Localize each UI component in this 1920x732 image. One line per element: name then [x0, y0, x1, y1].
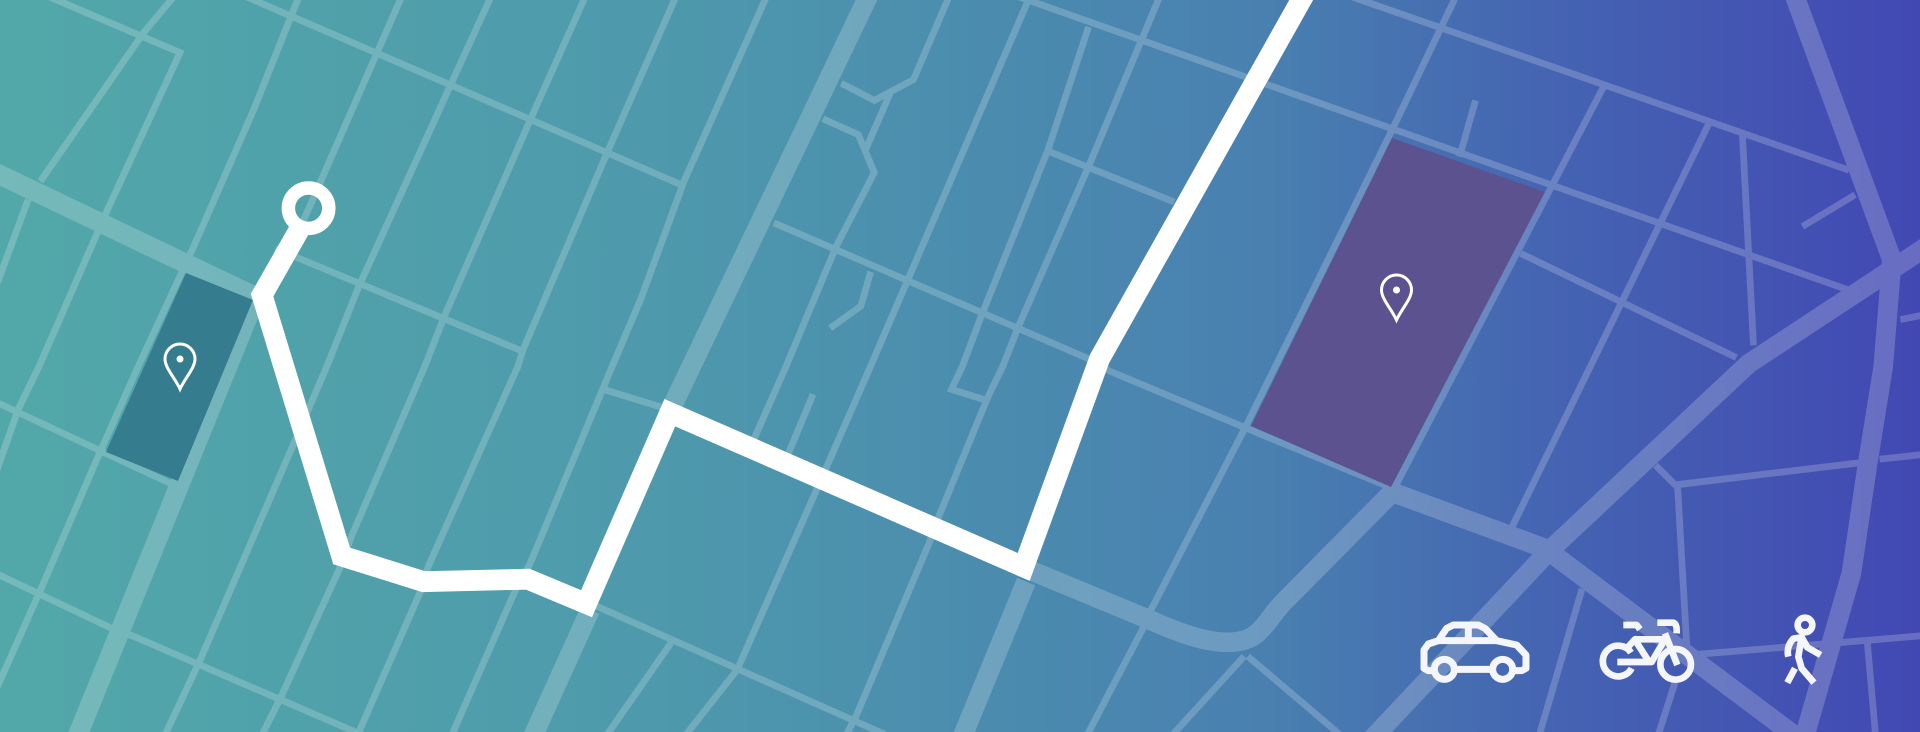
icon: location pin on purple block	[1382, 275, 1412, 320]
icon: bicycle	[1603, 623, 1691, 680]
map block: purple destination	[1251, 138, 1545, 487]
route line	[262, 0, 1305, 604]
icon: car	[1424, 625, 1526, 679]
icon: location pin on teal block	[165, 344, 195, 389]
icon: pedestrian	[1787, 618, 1821, 683]
map block: teal destination	[106, 273, 253, 481]
route start marker	[288, 188, 329, 228]
